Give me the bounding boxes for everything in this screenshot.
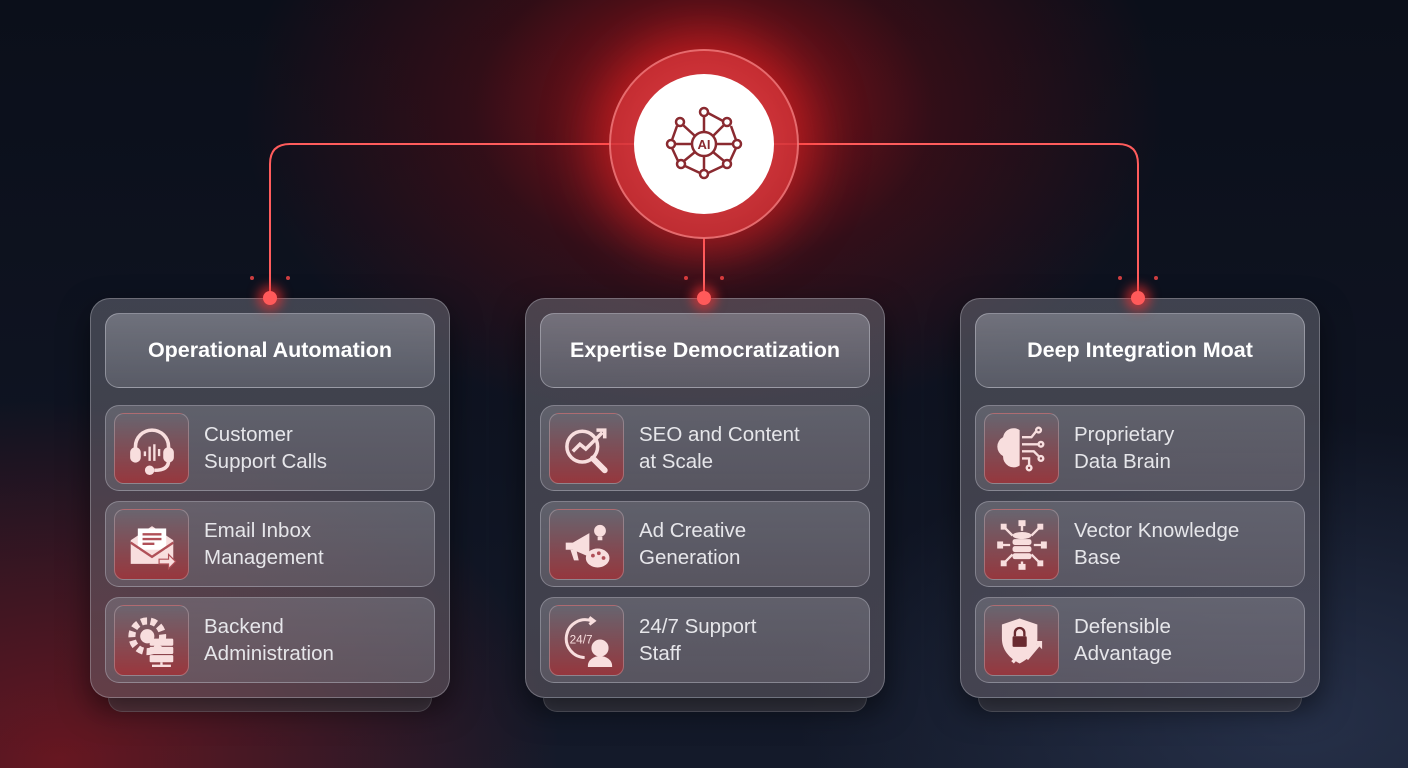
item: SEO — [540, 405, 870, 491]
item: 24/7: 24/7 — [569, 632, 592, 646]
connector dots — [263, 291, 277, 305]
item: ad creative: Generation — [639, 546, 740, 569]
item: ad creative — [540, 501, 870, 587]
item: email — [105, 501, 435, 587]
panel: Expertise Democratization — [522, 298, 891, 715]
item: ad creative: Ad Creative — [639, 519, 746, 542]
item: email: Email Inbox — [204, 519, 311, 542]
item: 24/7: 24/7 Support — [639, 615, 756, 638]
item: customer support: Support Calls — [204, 450, 327, 473]
heading — [540, 313, 870, 388]
item: 24/7 — [540, 597, 870, 683]
item: backend: Administration — [204, 642, 334, 665]
item: SEO: SEO and Content — [639, 423, 800, 446]
item: brain: Proprietary — [1074, 423, 1174, 446]
item: shield: Defensible — [1074, 615, 1171, 638]
item: SEO: at Scale — [639, 450, 713, 473]
icon: AI network — [634, 74, 774, 214]
item: 24/7: Staff — [639, 642, 681, 665]
panel: Operational Automation — [78, 298, 454, 723]
item: customer support — [105, 405, 435, 491]
item: vector DB: Vector Knowledge — [1074, 519, 1239, 542]
heading: Deep Integration Moat — [1027, 338, 1253, 362]
heading — [105, 313, 435, 388]
item: vector DB — [975, 501, 1305, 587]
item: shield — [975, 597, 1305, 683]
AI hub — [609, 49, 799, 239]
heading — [975, 313, 1305, 388]
panel: Deep Integration Moat — [953, 298, 1330, 722]
item: shield: Advantage — [1074, 642, 1172, 665]
item: email: Management — [204, 546, 324, 569]
item: vector DB: Base — [1074, 546, 1121, 569]
item: backend — [105, 597, 435, 683]
item: backend: Backend — [204, 615, 284, 638]
item: brain: Data Brain — [1074, 450, 1171, 473]
heading: Expertise Democratization — [570, 338, 840, 362]
heading: Operational Automation — [148, 338, 392, 362]
item: brain — [975, 405, 1305, 491]
icon: AI network: AI — [698, 137, 710, 152]
item: customer support: Customer — [204, 423, 293, 446]
